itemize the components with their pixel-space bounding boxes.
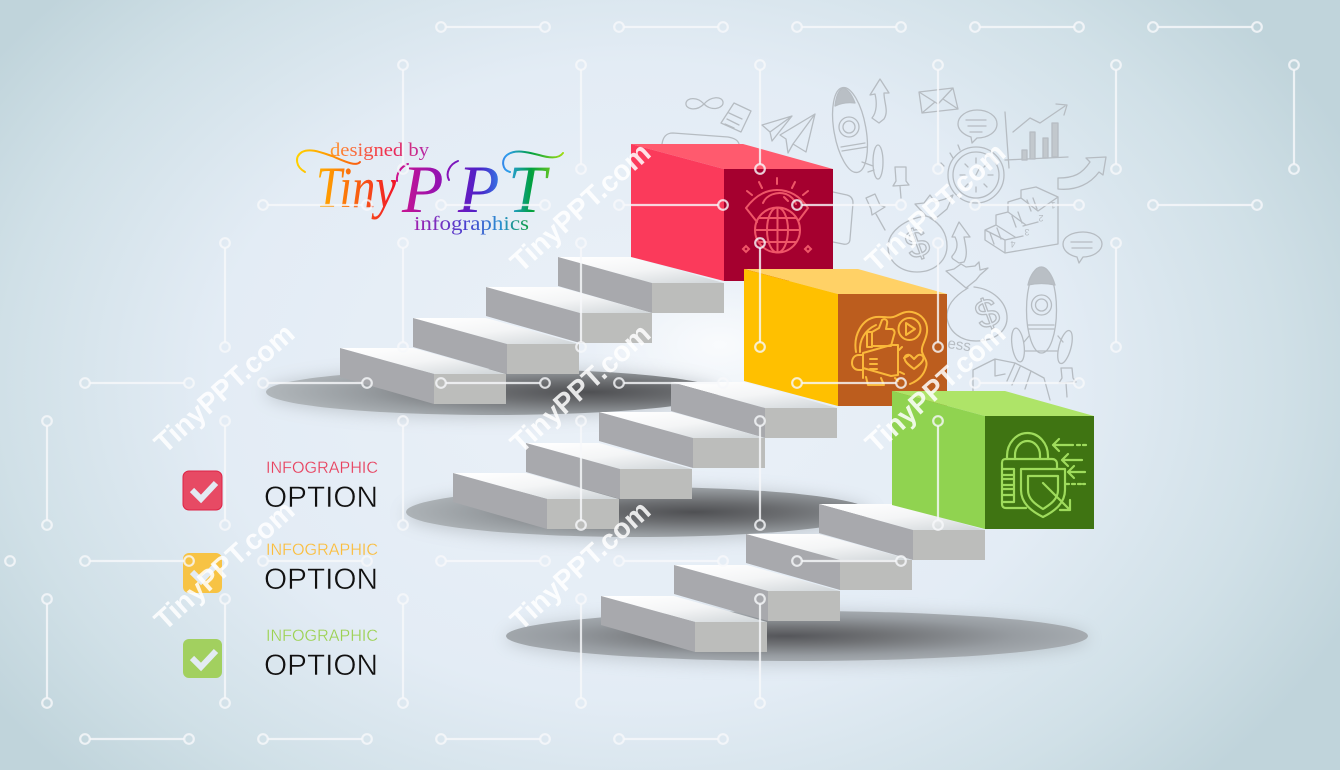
doodle: money bag: $ — [899, 219, 935, 268]
doodle: stairs 2 — [973, 359, 1050, 400]
doodle: speech bubble — [958, 110, 997, 143]
doodle: pins — [866, 167, 909, 230]
floor shadow: top stairs — [265, 368, 721, 418]
floor shadow: bottom stairs — [505, 611, 1089, 665]
watermarks: TinyPPT.com — [859, 137, 1012, 279]
icon: red check box — [183, 471, 222, 510]
label: infographic: INFOGRAPHIC — [266, 627, 378, 645]
staircase: top (leads to red block) — [340, 257, 724, 404]
option 1: red — [183, 459, 378, 514]
doodle: tablet — [662, 133, 853, 244]
doodle: money bag 2 — [946, 262, 1007, 341]
watermarks: TinyPPT.com — [504, 137, 657, 279]
doodle: pin 2 — [1059, 368, 1076, 397]
logo: designed by: designed by — [330, 140, 430, 161]
label: option: OPTION — [264, 649, 378, 682]
icon: green check box — [183, 639, 222, 678]
floor shadow: middle stairs — [404, 487, 872, 541]
icon: yellow check box — [183, 553, 222, 593]
logo: infographics: infographics — [414, 213, 529, 235]
icon: padlock and shield — [1002, 433, 1086, 517]
doodle: rocket — [827, 85, 883, 179]
option 3: green — [183, 627, 378, 682]
block: yellow with megaphone and like icon — [744, 269, 947, 406]
doodle: word fragment: ess — [946, 335, 972, 355]
doodle: money bag — [888, 195, 953, 272]
watermarks: TinyPPT.com — [504, 495, 657, 637]
block: green with padlock and shield icon — [892, 391, 1094, 529]
doodle: curved arrow — [870, 79, 889, 123]
block: red with eye and globe icon — [631, 144, 833, 281]
doodle: stairs: 4 — [1010, 239, 1016, 249]
watermarks: TinyPPT.com — [148, 495, 301, 637]
label: infographic: INFOGRAPHIC — [266, 459, 378, 477]
soft glow behind stairs — [590, 270, 850, 420]
doodle: money bag 2: $ — [969, 289, 1005, 338]
option 2: yellow — [183, 541, 378, 596]
doodle: note — [721, 103, 751, 132]
logo: PPT: PPT — [401, 151, 550, 227]
watermarks — [148, 137, 1012, 637]
logo: swashes — [297, 150, 563, 181]
doodle: stairs: 3 — [1024, 227, 1030, 237]
watermarks: TinyPPT.com — [859, 318, 1012, 460]
doodle: up arrow — [952, 222, 970, 263]
icon: megaphone, thumb and heart — [852, 312, 927, 385]
label: option: OPTION — [264, 563, 378, 596]
staircase: middle (leads to yellow block) — [453, 382, 837, 529]
doodle illustrations — [662, 79, 1106, 400]
logo: designed by TinyPPT infographics — [297, 140, 563, 235]
icon: eye and globe — [743, 178, 811, 252]
doodle: bar chart — [1005, 104, 1068, 168]
doodle: paper planes — [762, 114, 815, 153]
doodle: envelope — [919, 88, 958, 113]
label: option: OPTION — [264, 481, 378, 514]
doodle: rocket 2 — [1010, 267, 1075, 365]
logo: Tiny: Tiny — [316, 155, 396, 220]
doodle: clock — [941, 145, 1004, 203]
doodle: stairs: 1 — [1050, 200, 1056, 210]
doodle: stairs: 2 — [1038, 213, 1044, 223]
doodle: speech bubble 2 — [1063, 232, 1102, 263]
label: infographic: INFOGRAPHIC — [266, 541, 378, 559]
doodle: infinity — [686, 98, 723, 109]
watermarks: TinyPPT.com — [504, 318, 657, 460]
staircase: bottom (leads to green block) — [601, 504, 985, 652]
doodle: arrow right — [1058, 157, 1106, 189]
option list — [183, 459, 378, 682]
watermarks: TinyPPT.com — [148, 318, 301, 460]
doodle: stairs — [985, 187, 1058, 253]
